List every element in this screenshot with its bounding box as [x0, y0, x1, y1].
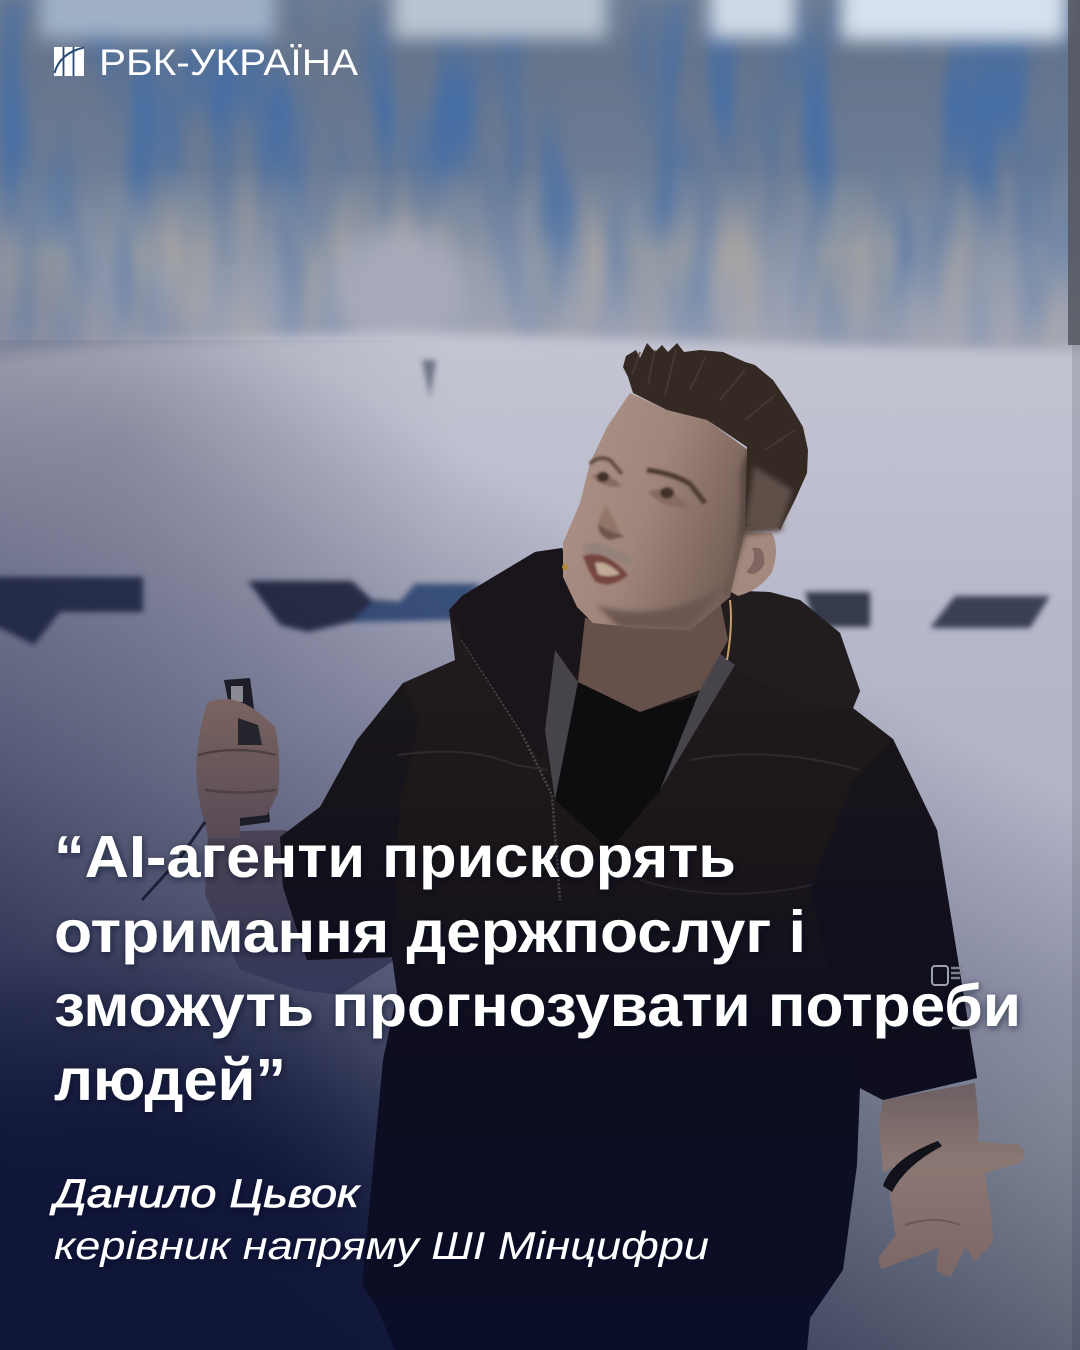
- sleeve badge: [932, 966, 976, 1028]
- logo wordmark: РБК-УКРАЇНА: [99, 41, 358, 83]
- forearm: [205, 830, 395, 995]
- quote headline: “AI-агенти прискорять: [54, 824, 736, 890]
- jacket and vest: [280, 548, 977, 1350]
- ear: [724, 533, 776, 596]
- logo icon: [54, 47, 84, 76]
- background: blurred stadium seats: [0, 0, 1080, 375]
- facial features: [562, 458, 731, 660]
- t-shirt: [555, 682, 698, 850]
- logo: РБК-Україна: [54, 41, 358, 83]
- neck: [578, 600, 728, 712]
- quote headline: [54, 824, 1021, 1113]
- quote headline: людей”: [54, 1047, 286, 1113]
- person: Danylo Tsvok: [142, 343, 1023, 1350]
- hood and inner lining: [545, 650, 735, 800]
- background: light wall: [0, 332, 1080, 1350]
- hair: [623, 343, 808, 530]
- clicker and raised hand: [142, 678, 279, 900]
- attribution: speaker name and role: [49, 1172, 709, 1268]
- collar left: [449, 548, 590, 760]
- face: [563, 393, 748, 630]
- attribution: speaker name and role: керівник напряму ШІ Мінцифри: [54, 1225, 709, 1268]
- attribution: speaker name and role: Данило Цьвок: [49, 1172, 361, 1216]
- quote headline: зможуть прогнозувати потреби: [54, 973, 1021, 1039]
- quote headline: отримання держпослуг і: [54, 899, 806, 965]
- zipper and quilting lines: [398, 640, 860, 900]
- lower arm and open hand: [879, 1083, 1023, 1275]
- left and right sleeves: [280, 683, 977, 1100]
